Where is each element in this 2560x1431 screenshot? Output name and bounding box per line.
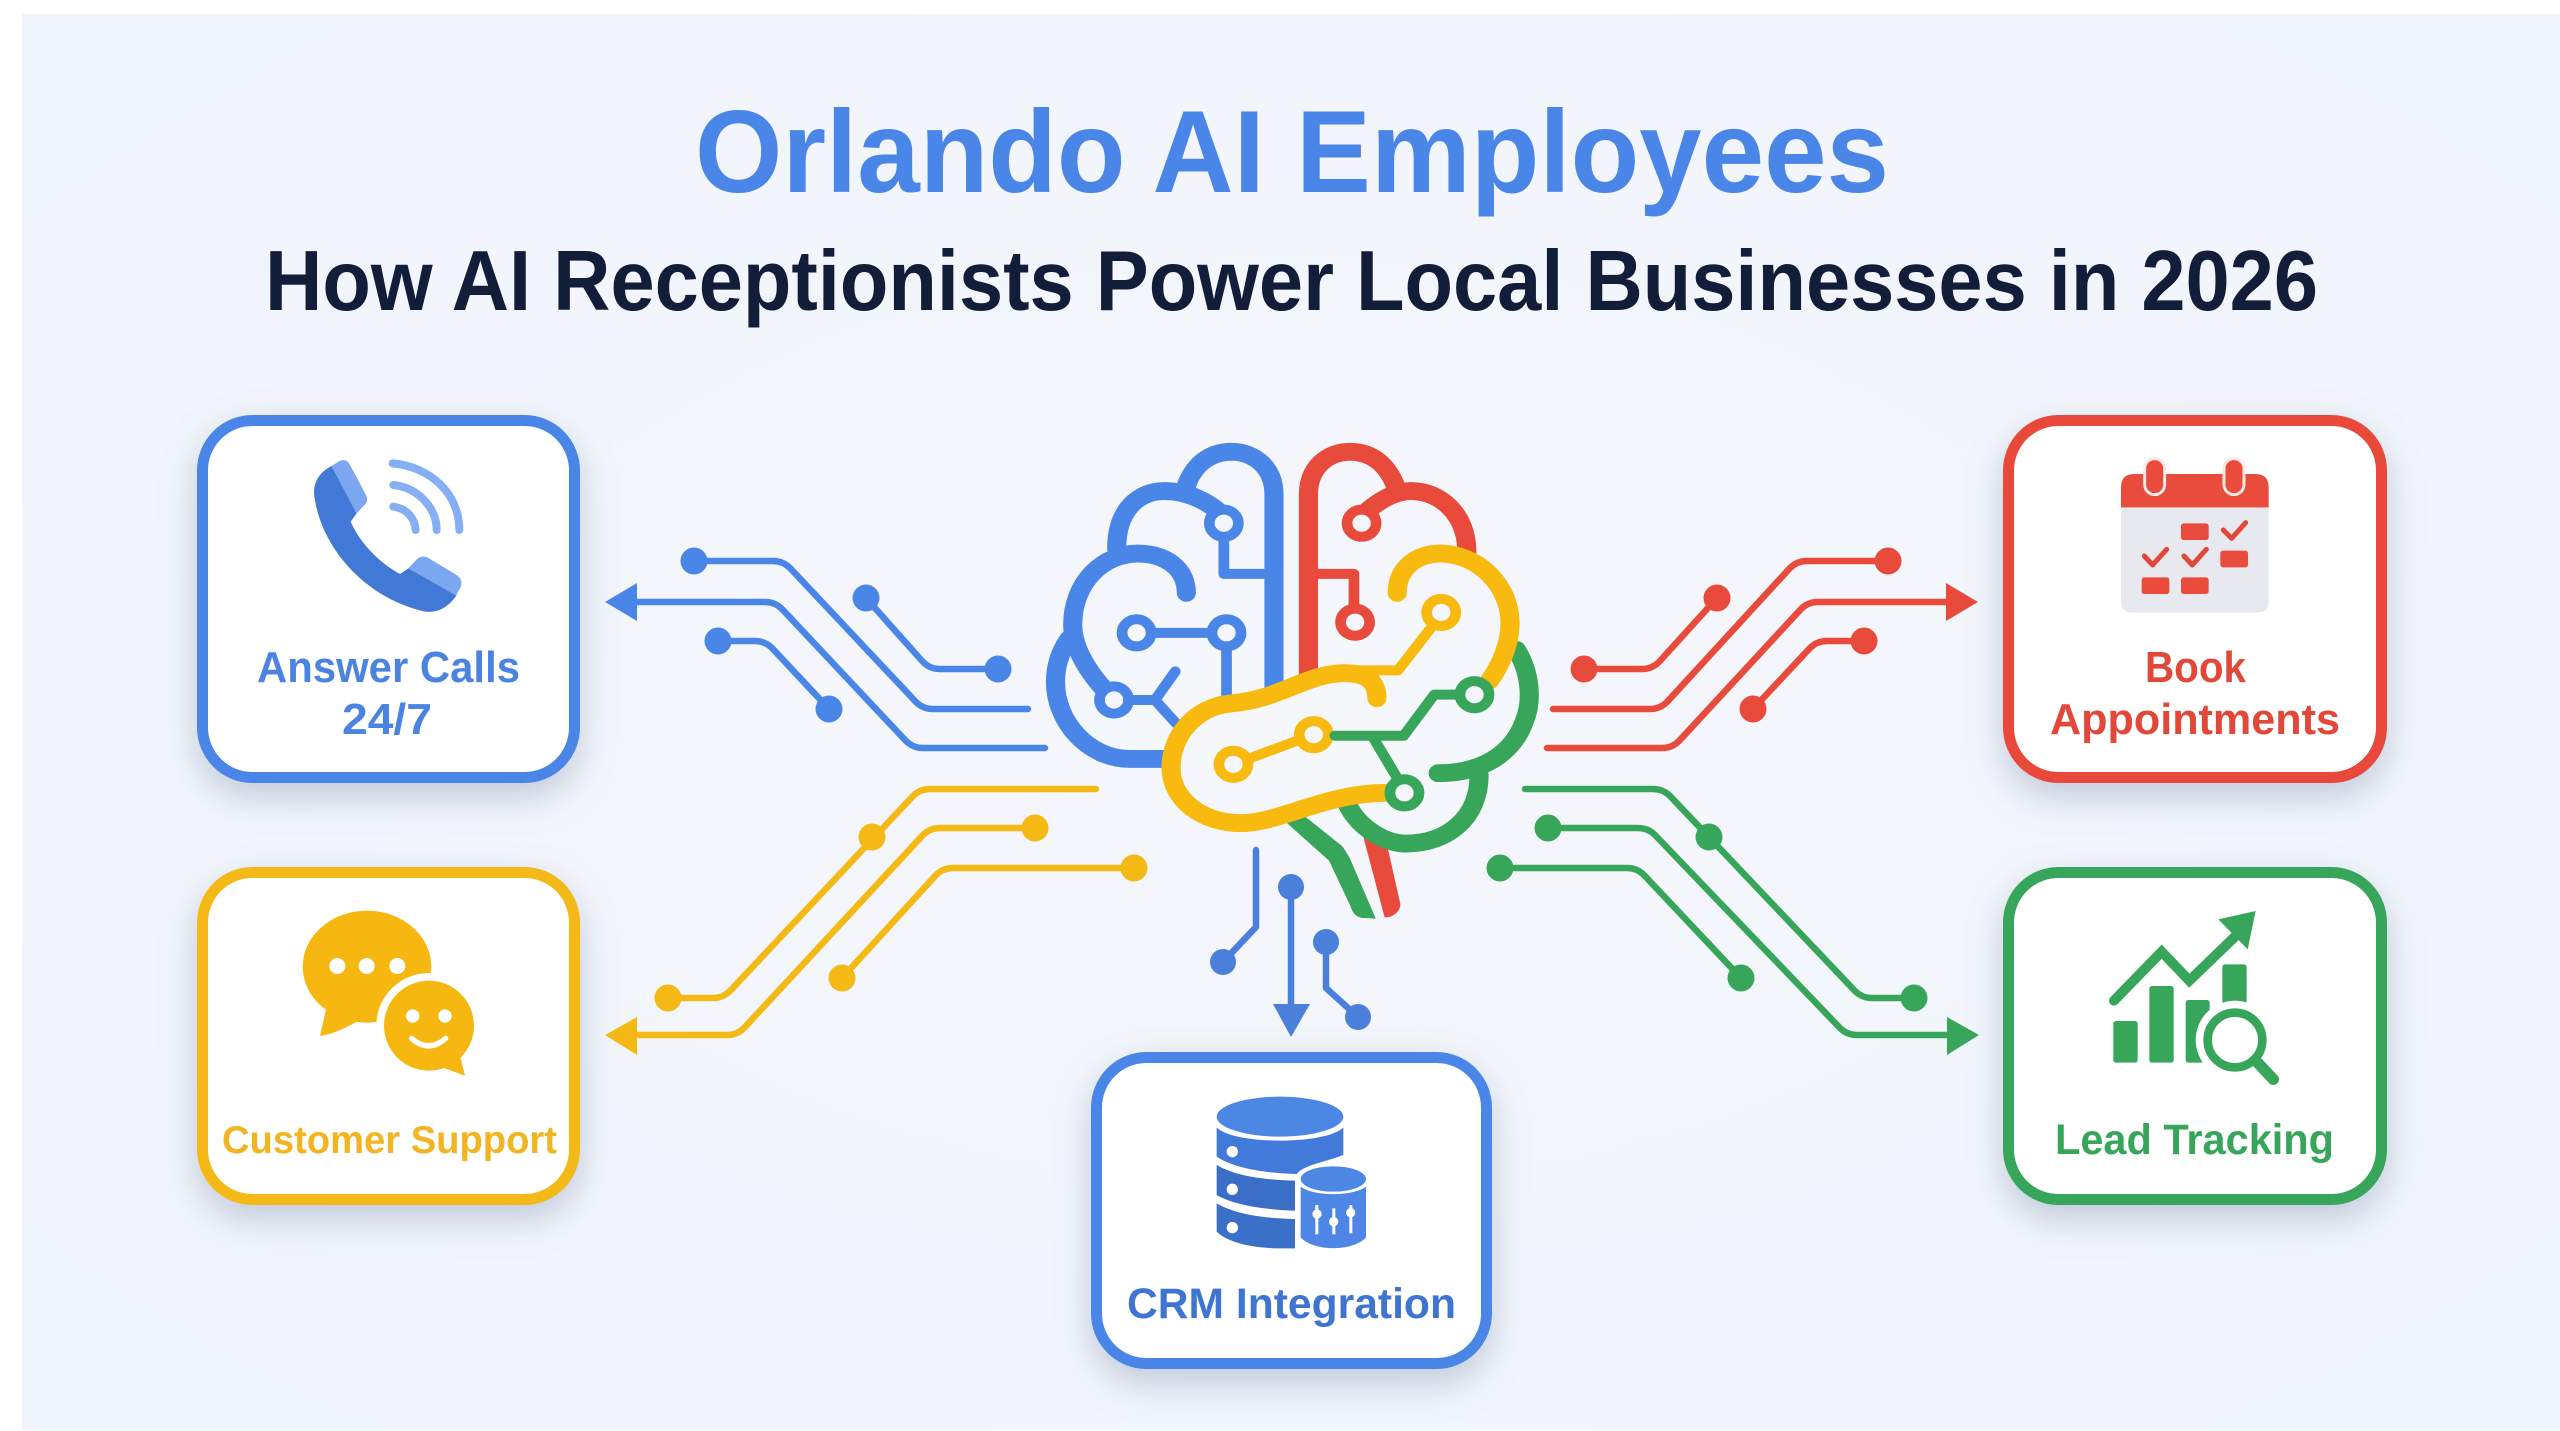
label: Appointments — [2050, 695, 2340, 744]
card: Answer Calls 24/7 — [202, 420, 574, 778]
circuit: yellow to Customer Support — [605, 789, 1148, 1055]
subtitle: How AI Receptionists Power Local Businesses in 2026 — [265, 234, 2318, 329]
label: Customer Support — [222, 1119, 557, 1162]
label: Book — [2145, 643, 2246, 692]
label: Lead Tracking — [2055, 1116, 2334, 1164]
green lobe — [1346, 650, 1529, 844]
brain stem — [1285, 814, 1400, 919]
blue hemisphere — [1055, 452, 1274, 759]
green circuit nodes — [1335, 681, 1489, 806]
label: Answer Calls — [257, 643, 520, 692]
circuit: red to Book Appointments — [1547, 548, 1978, 748]
circuit: blue to CRM Integration — [1210, 850, 1371, 1037]
icon: database — [1217, 1097, 1372, 1252]
label — [2050, 643, 2340, 744]
icon: chat bubbles — [303, 911, 482, 1078]
yellow lobe — [1171, 554, 1510, 823]
card: Customer Support — [202, 872, 574, 1200]
brain illustration — [1055, 452, 1529, 919]
red hemisphere — [1308, 452, 1467, 677]
label — [257, 643, 520, 744]
icon: growth chart with magnifier — [2113, 911, 2274, 1079]
card: Book Appointments — [2008, 420, 2382, 778]
title: Orlando AI Employees — [695, 86, 1889, 217]
circuit: blue to Answer Calls — [605, 548, 1045, 748]
label: 24/7 — [342, 695, 432, 744]
circuit: green to Lead Tracking — [1486, 789, 1979, 1055]
icon: phone — [314, 460, 461, 612]
card: Lead Tracking — [2008, 872, 2382, 1200]
label: CRM Integration — [1127, 1280, 1456, 1328]
card: CRM Integration — [1096, 1058, 1486, 1364]
icon: calendar — [2121, 459, 2269, 612]
